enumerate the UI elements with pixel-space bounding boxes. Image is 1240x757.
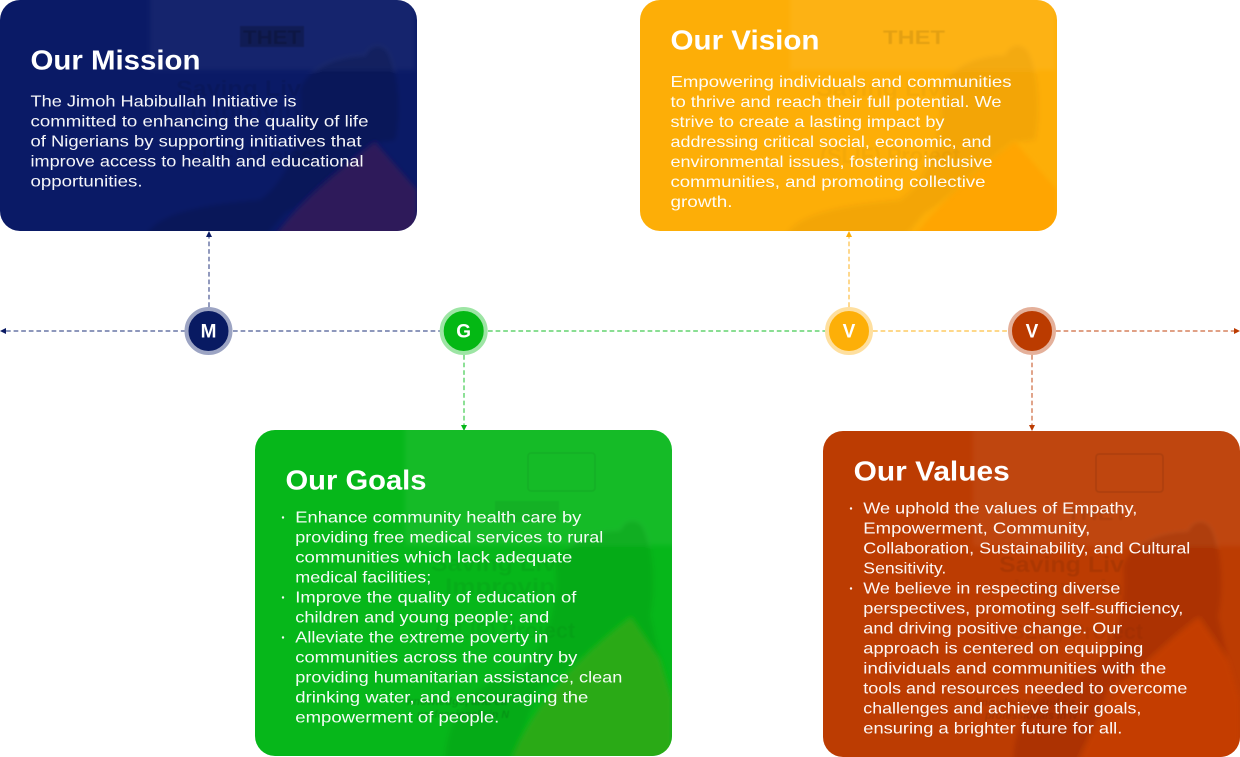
timeline connectors <box>6 236 1235 426</box>
list: goals: empowerment of people. <box>295 710 499 726</box>
node: G: G <box>456 322 471 342</box>
text: vision body: Empowering individuals and communities <box>670 74 1012 91</box>
list: values: We believe in respecting diverse <box>863 580 1120 597</box>
text: mission body: opportunities. <box>30 174 142 190</box>
list: goals: Enhance community health care by <box>295 510 581 526</box>
list: values: perspectives, promoting self-sufficiency, <box>863 600 1183 617</box>
list: goals: Alleviate the extreme poverty in <box>295 630 548 646</box>
text: vision body: strive to create a lasting impact by <box>670 114 944 131</box>
text: vision body: addressing critical social, economic, and <box>670 134 992 151</box>
list: goals <box>282 510 622 726</box>
heading: our goals: Our Goals <box>286 464 426 496</box>
text: vision body: environmental issues, fostering inclusive <box>670 154 993 171</box>
list: goals: medical facilities; <box>295 570 431 586</box>
node: V vision: V <box>843 322 856 342</box>
panel: mission: (SLIF) Project <box>180 143 321 168</box>
text: vision body: to thrive and reach their full potential. We <box>670 94 1002 111</box>
list: values: tools and resources needed to overcome <box>863 680 1187 697</box>
list: values <box>850 500 1190 737</box>
list: values: Empowerment, Community, <box>863 520 1090 537</box>
text: mission body: of Nigerians by supporting initiatives that <box>30 134 362 150</box>
panel: vision: THET <box>883 28 945 49</box>
arrow: up to vision <box>846 231 852 237</box>
text: vision body <box>670 74 1012 211</box>
list: goals: providing humanitarian assistance, clean <box>295 670 622 686</box>
list: goals: providing free medical services to rural <box>295 530 603 546</box>
node: V values: V <box>1026 322 1039 342</box>
list: goals: communities which lack adequate <box>295 550 572 566</box>
panel: goals: Improvin <box>445 574 555 599</box>
arrow: timeline right <box>1234 328 1240 334</box>
node: V values <box>1010 309 1054 353</box>
panel: values: professionals in N <box>984 710 1078 722</box>
panel: goals: professionals in N <box>416 709 510 721</box>
panel: values: knowledge, and ca <box>975 697 1075 709</box>
list: values: individuals and communities with the <box>863 660 1166 677</box>
panel: vision: (SLIF) Project <box>820 143 961 168</box>
list: goals: children and young people; and <box>295 610 549 626</box>
panel: goals: knowledge, and ca <box>407 696 507 708</box>
list: values: and driving positive change. Our <box>863 620 1123 637</box>
panel: values: THET <box>1066 504 1128 525</box>
list: values: We uphold the values of Empathy, <box>863 500 1137 517</box>
text: mission body: The Jimoh Habibullah Initiative is <box>30 94 296 110</box>
heading: our values: Our Values <box>854 456 1010 487</box>
list: values: Collaboration, Sustainability, and Cultural <box>863 540 1190 557</box>
list: goals: communities across the country by <box>295 650 577 666</box>
text: vision body: growth. <box>670 194 732 211</box>
panel: values: Improvin <box>1013 575 1123 600</box>
panel: vision: Saving Liv <box>816 76 942 101</box>
heading: our vision: Our Vision <box>670 24 820 56</box>
node: G <box>442 309 486 353</box>
panel: goals <box>255 415 685 757</box>
arrow: timeline left <box>0 328 6 334</box>
panel: mission: Saving Liv <box>176 76 302 101</box>
panel: values <box>823 416 1240 757</box>
list: goals: Improve the quality of education of <box>295 590 577 606</box>
arrow: down to goals <box>461 425 467 431</box>
text: mission body: committed to enhancing the quality of life <box>30 114 369 130</box>
text: vision body: communities, and promoting collective <box>670 174 986 191</box>
panel: vision <box>640 0 1057 240</box>
panel: mission <box>0 0 417 240</box>
arrow: up to mission <box>206 231 212 237</box>
list: values: Sensitivity. <box>863 560 946 577</box>
panel: goals: (SLIF) Project <box>435 618 576 643</box>
list: values: challenges and achieve their goals, <box>863 700 1141 717</box>
panel: mission: THET <box>243 28 301 49</box>
list: values: ensuring a brighter future for all. <box>863 720 1122 737</box>
list: values: approach is centered on equipping <box>863 640 1143 657</box>
panel: values: (SLIF) Project <box>1003 619 1144 644</box>
heading: our mission: Our Mission <box>30 44 200 76</box>
text: mission body <box>30 94 369 190</box>
node: M: M <box>201 322 216 342</box>
node: V vision <box>827 309 871 353</box>
panel: values: Saving Liv <box>999 552 1125 577</box>
text: mission body: improve access to health and educational <box>30 154 364 170</box>
panel: mission: Improvin <box>190 99 300 124</box>
panel: goals: Saving Liv <box>431 551 557 576</box>
arrow: down to values <box>1029 425 1035 431</box>
node: M <box>186 309 230 353</box>
list: goals: drinking water, and encouraging the <box>295 690 588 706</box>
